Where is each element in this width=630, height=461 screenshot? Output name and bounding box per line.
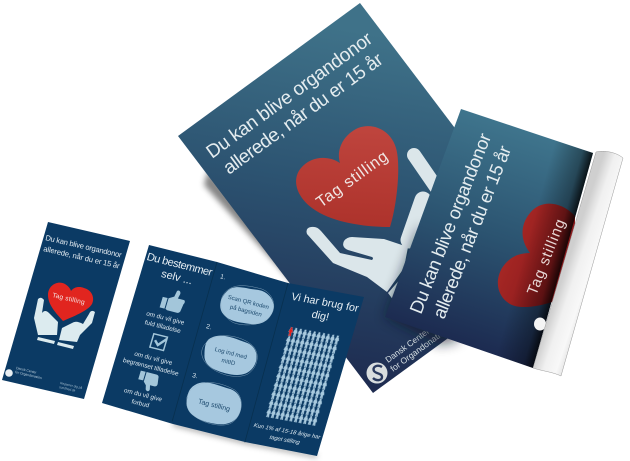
heading: small card title: Du kan blive organdonor bbox=[45, 233, 123, 260]
hole in flyer bbox=[534, 318, 546, 330]
icon: thumbs up bbox=[159, 287, 188, 314]
icon: small heart bbox=[48, 283, 93, 321]
text: statistic caption: taget stilling bbox=[269, 435, 301, 446]
text: small card organisation: Dansk Center bbox=[16, 366, 38, 375]
text: small card footer: Registrer dig på bbox=[60, 381, 83, 390]
heading: small card title: allerede, når du er 15 år bbox=[43, 244, 121, 271]
icon: large heart bbox=[296, 126, 398, 227]
panel: small card bbox=[2, 222, 130, 399]
panel: brochure sheet bbox=[102, 245, 364, 456]
fold line bbox=[172, 262, 217, 421]
text: limited permission: begrænset tilladelse bbox=[122, 357, 180, 378]
text: step 1 bbox=[224, 295, 269, 320]
icon: flyer heart bbox=[498, 204, 575, 307]
roll: curled paper bbox=[533, 151, 623, 376]
text: large booklet organisation: for Organdonation bbox=[388, 325, 450, 374]
brochure shadow bbox=[173, 421, 317, 458]
heading: flyer title: Du kan blive organdonor bbox=[405, 130, 495, 316]
icon: small hands bbox=[34, 298, 95, 349]
text: small card organisation: for Organdonation bbox=[15, 370, 42, 380]
text: limited permission bbox=[122, 348, 182, 378]
text: statistic caption bbox=[251, 422, 322, 450]
heading: flyer title: allerede, når du er 15 år bbox=[428, 143, 515, 321]
icon: small card logo bbox=[5, 369, 13, 377]
text: step 1: Scan QR koden bbox=[227, 295, 269, 311]
text: step 2 bbox=[211, 347, 247, 370]
flyer shadow bbox=[385, 225, 460, 345]
highlighted red person bbox=[287, 327, 294, 336]
label: flyer heart text: Tag stilling bbox=[524, 217, 569, 297]
heading: vi har brug for dig: Vi har brug for bbox=[290, 291, 360, 315]
icon: checkbox bbox=[150, 334, 167, 351]
panel: large booklet bbox=[178, 3, 555, 393]
steps: 1. bbox=[219, 273, 227, 281]
steps: 2. bbox=[205, 323, 212, 331]
step 1 blob bbox=[216, 280, 278, 332]
panel: brochure right bbox=[245, 283, 362, 456]
text: prohibition: forbud bbox=[131, 398, 150, 410]
step 2 blob bbox=[197, 330, 262, 381]
heading: large booklet title: Du kan blive organdonor bbox=[203, 28, 377, 163]
panel: curled flyer bbox=[385, 109, 623, 376]
text: prohibition: om du vil give bbox=[123, 387, 163, 403]
large booklet shadow bbox=[204, 170, 362, 352]
label: large heart text: Tag stilling bbox=[313, 148, 391, 211]
heading: vi har brug for dig: dig! bbox=[310, 309, 330, 323]
text: small card footer: sundhed.dk bbox=[59, 385, 76, 393]
text: full permission: om du vil give bbox=[145, 310, 186, 327]
step 3 blob bbox=[182, 377, 246, 430]
steps: 3. bbox=[191, 372, 199, 380]
panel: brochure left bbox=[105, 251, 214, 415]
heading: du bestemmer: selv ... bbox=[160, 268, 194, 287]
text: large booklet organisation: Dansk Center bbox=[383, 326, 431, 365]
text: full permission bbox=[143, 310, 186, 335]
text: limited permission: om du vil give bbox=[133, 351, 174, 367]
steps bbox=[191, 273, 227, 380]
text: full permission: fuld tilladelse bbox=[144, 319, 182, 335]
fold line bbox=[245, 283, 288, 442]
heading: large booklet title: allerede, når du er 15 år bbox=[220, 49, 388, 179]
heading: du bestemmer bbox=[142, 251, 214, 291]
text: statistic caption: Kun 1% af 15-18 årige har bbox=[253, 422, 322, 441]
icon: large booklet logo bbox=[366, 362, 388, 384]
icon: thumbs down bbox=[136, 371, 160, 393]
text: step 2: mitID bbox=[221, 358, 236, 367]
text: prohibition bbox=[120, 387, 163, 412]
text: step 1: på bagsiden bbox=[229, 304, 263, 319]
chart: people pictogram grid bbox=[265, 327, 340, 426]
shade: flyer curl shadow bbox=[460, 129, 593, 368]
panel: brochure middle bbox=[172, 262, 282, 438]
text: step 3: Tag stilling bbox=[197, 398, 231, 413]
heading: vi har brug for dig bbox=[286, 291, 360, 328]
label: small heart text: Tag stilling bbox=[52, 292, 86, 306]
heading: small card title bbox=[43, 233, 123, 271]
heading: du bestemmer: Du bestemmer bbox=[145, 251, 214, 279]
icon: large hands bbox=[306, 155, 436, 301]
text: step 2: Log ind med bbox=[214, 347, 247, 361]
